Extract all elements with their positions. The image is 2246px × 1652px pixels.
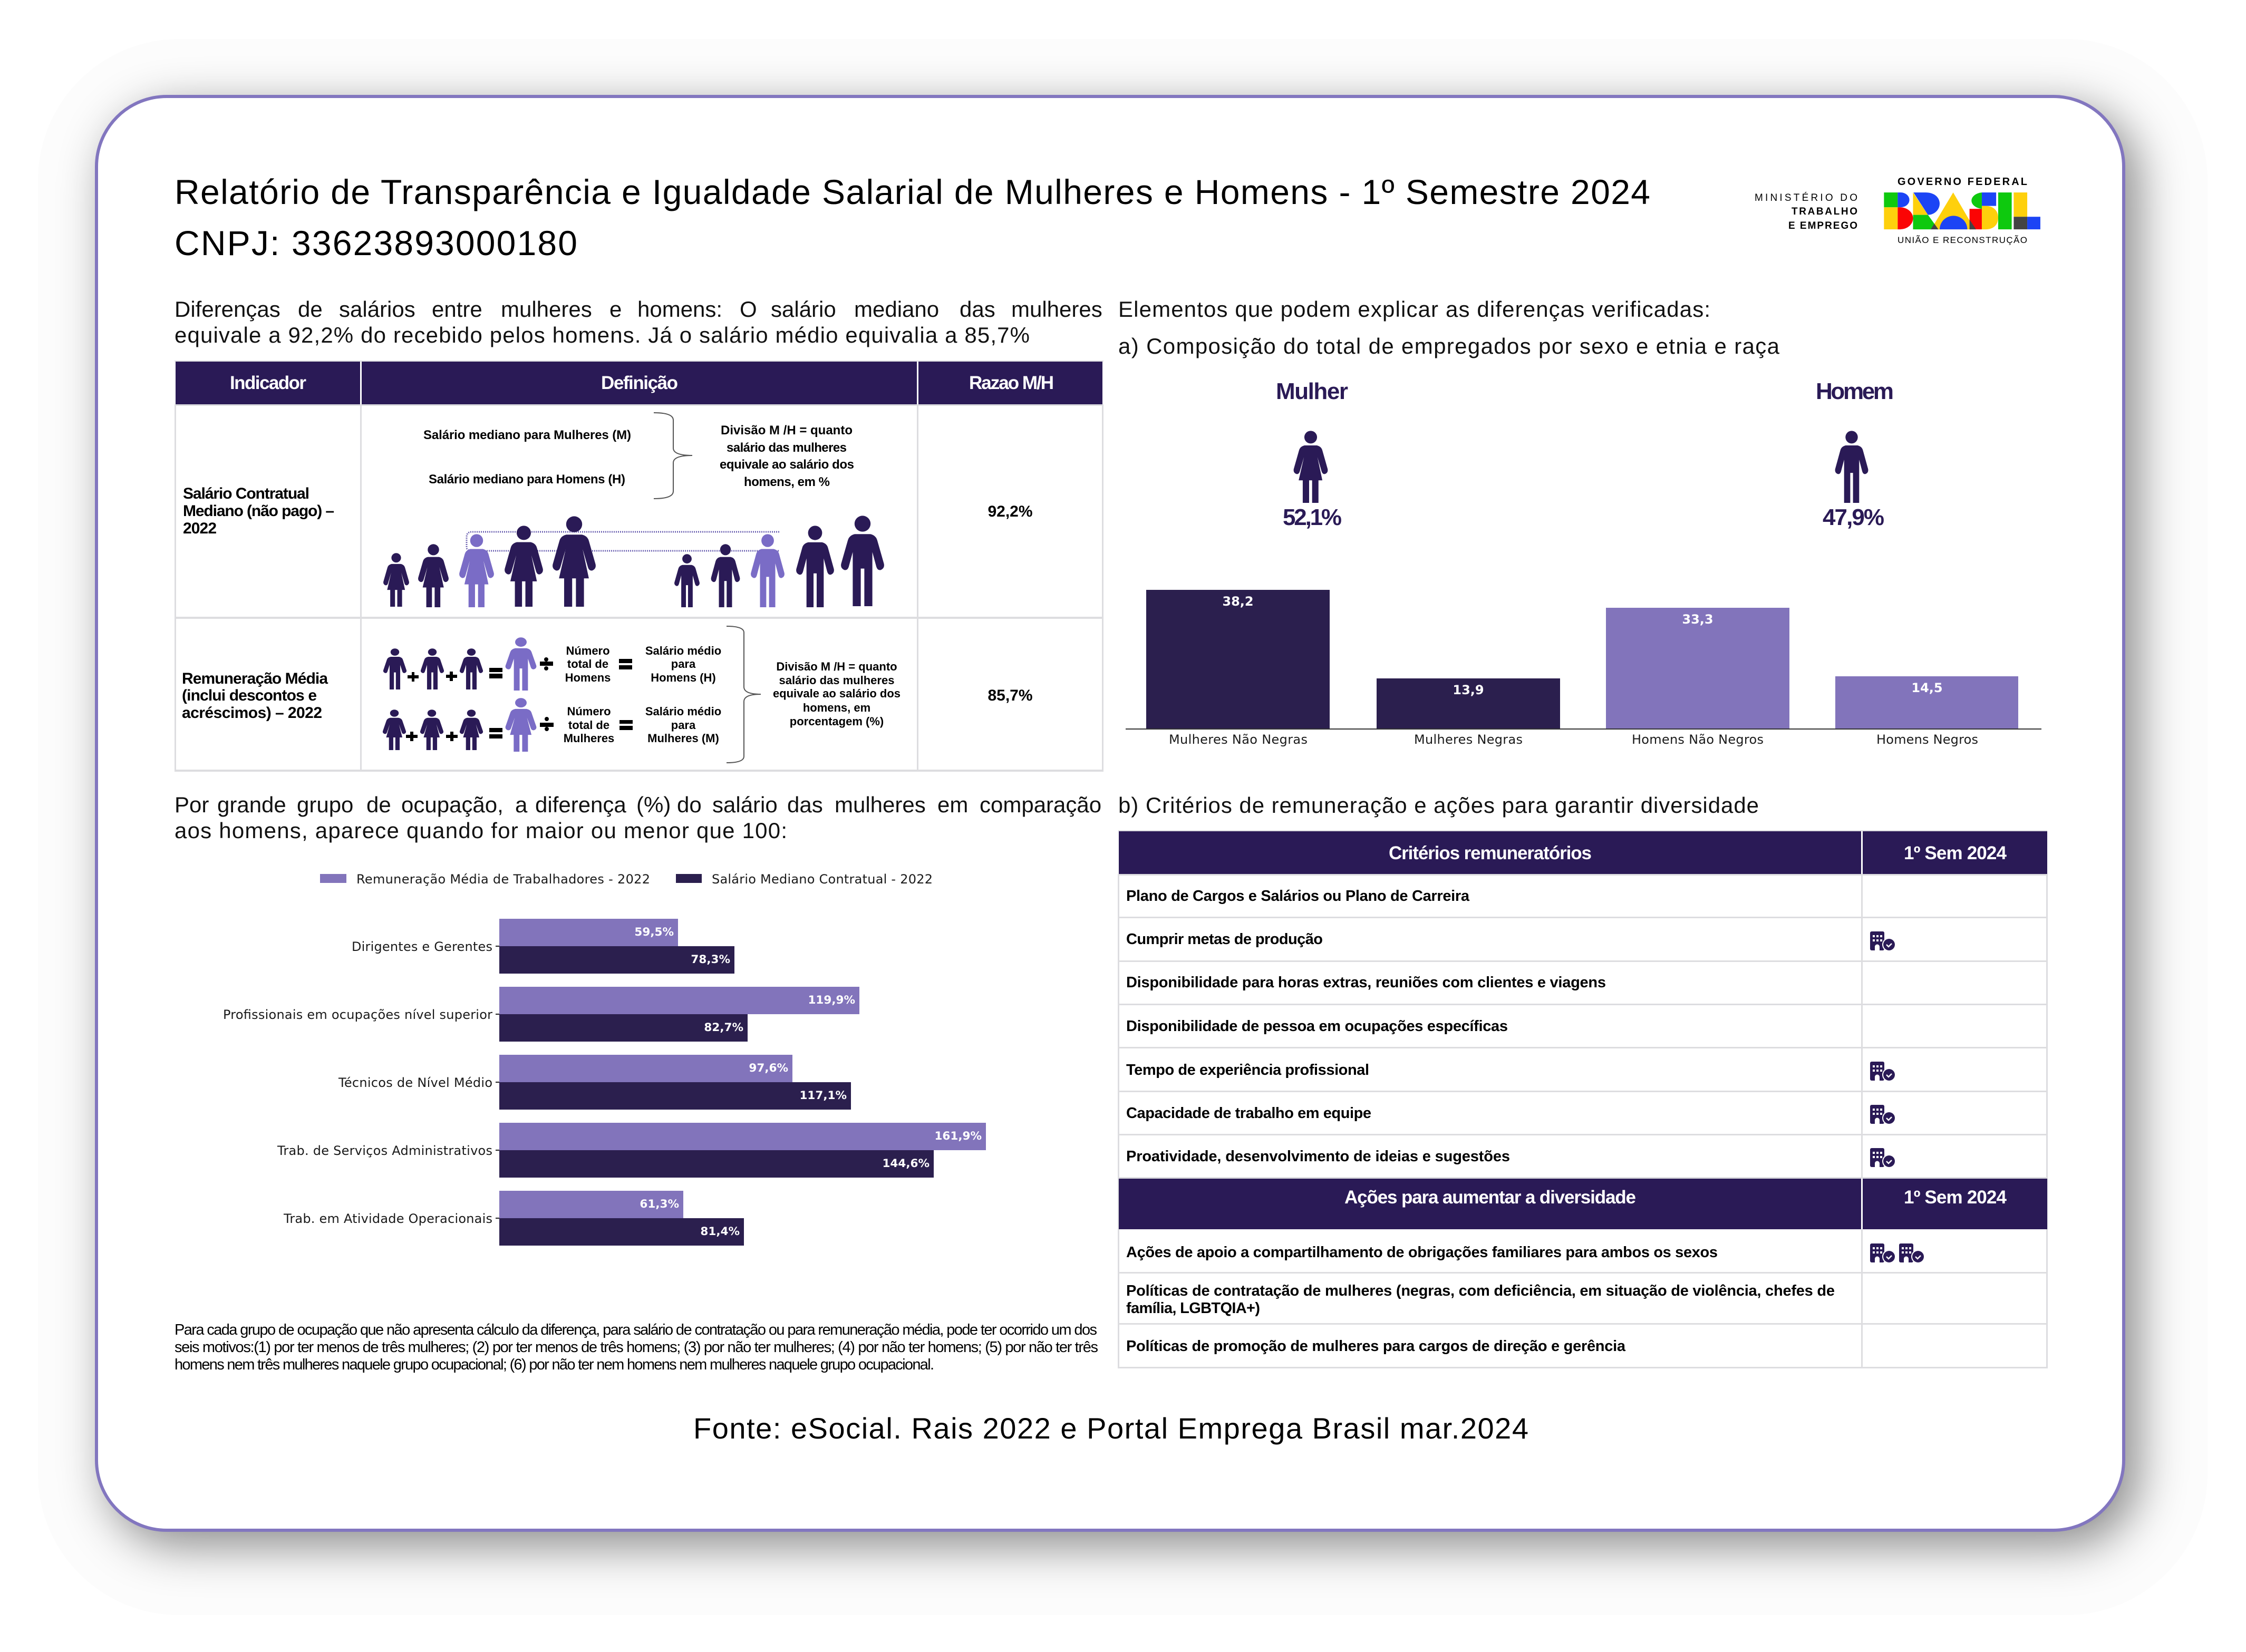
- bar: homens negros: Homens Negros: [1876, 732, 1978, 747]
- table header: Definição: [601, 373, 678, 393]
- heading: composição: a) Composição do total de empregados por sexo e etnia e raça: [1118, 334, 1780, 358]
- sex split: homem: 47,9%: [1823, 504, 1884, 530]
- ministry wordmark: MINISTÉRIO DO: [1755, 192, 1857, 203]
- logos: ministério and governo federal: [1755, 176, 2040, 245]
- definition text: mediano: [423, 428, 631, 487]
- intro text left: e: [609, 297, 622, 322]
- criteria rows: [1126, 888, 1606, 1165]
- bar: homens não negros: [1606, 608, 1789, 747]
- definition text: mediano: Salário mediano para Mulheres (M): [423, 428, 631, 442]
- sex split: homem: Homem: [1816, 378, 1894, 404]
- header: critérios: Critérios remuneratórios: [1389, 843, 1592, 863]
- group: atividade operacionais: Trab. em Atividade Operacionais: [283, 1211, 492, 1226]
- icon: building check, produção: [1870, 931, 1896, 951]
- heading: grupo de ocupação: grande: [217, 792, 286, 817]
- legend: [320, 872, 933, 887]
- group: serviços administrativos: [277, 1123, 986, 1178]
- equation: men average: [383, 637, 721, 691]
- brace: média: [727, 626, 761, 763]
- explanation: divisão média: salário das mulheres: [779, 674, 894, 687]
- table header: Razao M/H: [969, 373, 1054, 393]
- equation: men average: Homens (H): [651, 671, 716, 684]
- icon: woman: [1294, 431, 1328, 503]
- group: profissionais: Profissionais em ocupações nível superior: [223, 1007, 492, 1022]
- criteria rows: Plano de Cargos e Salários ou Plano de Carreira: [1126, 888, 1470, 905]
- heading: grupo de ocupação: ocupação,: [401, 792, 504, 817]
- group: serviços administrativos: Trab. de Serviços Administrativos: [277, 1143, 492, 1158]
- group: profissionais: 119,9%: [808, 994, 855, 1007]
- equation: men average: Homens: [565, 671, 611, 684]
- intro text left: salários: [339, 297, 415, 322]
- união e reconstrução label: UNIÃO E RECONSTRUÇÃO: [1898, 235, 2027, 245]
- intro text left: mediano: [854, 297, 939, 322]
- action rows: família, LGBTQIA+): [1126, 1300, 1260, 1317]
- table header: Indicador: [230, 373, 306, 393]
- intro text left: de: [298, 297, 323, 322]
- criteria rows: Cumprir metas de produção: [1126, 931, 1323, 948]
- intro text left: equivale a 92,2% do recebido pelos homens. Já o salário médio equivalia a 85,7%: [175, 323, 1030, 347]
- criteria rows: Proatividade, desenvolvimento de ideias e sugestões: [1126, 1148, 1510, 1165]
- table: indicador, definição, razão: [175, 361, 1103, 772]
- group: profissionais: [223, 987, 859, 1042]
- intro text left: Diferenças: [175, 297, 280, 322]
- heading: grupo de ocupação: Por: [175, 792, 209, 817]
- header: ações: 1º Sem 2024: [1904, 1187, 2007, 1208]
- explanation: divisão média: equivale ao salário dos: [773, 687, 901, 700]
- explanation: divisão mediano: equivale ao salário dos: [720, 458, 854, 472]
- group: atividade operacionais: 81,4%: [700, 1225, 740, 1238]
- action rows: Políticas de contratação de mulheres (negras, com deficiência, em situação de violência, chefes de: [1126, 1282, 1835, 1299]
- bar chart: sex and race composition: [1126, 590, 2041, 747]
- heading: grupo de ocupação: mulheres: [835, 792, 926, 817]
- explanation: divisão média: porcentagem (%): [790, 715, 884, 728]
- bar: mulheres negras: 13,9: [1453, 683, 1484, 697]
- group: técnicos: Técnicos de Nível Médio: [338, 1075, 492, 1090]
- group: serviços administrativos: 161,9%: [934, 1130, 982, 1143]
- brace: mediano: [654, 413, 692, 499]
- icon row: women by salary: [383, 516, 596, 607]
- intro text left: das: [960, 297, 995, 322]
- explanation: divisão média: [773, 660, 901, 728]
- heading: grupo de ocupação: salário: [712, 792, 778, 817]
- group: dirigentes e gerentes: 59,5%: [634, 926, 674, 939]
- bar: mulheres não negras: Mulheres Não Negras: [1169, 732, 1308, 747]
- heading: grupo de ocupação: do: [677, 792, 702, 817]
- group: atividade operacionais: [283, 1191, 744, 1246]
- row label: remuneração média: acréscimos) – 2022: [182, 704, 322, 722]
- governo federal label: GOVERNO FEDERAL: [1898, 176, 2027, 188]
- equation: women average: total de: [568, 718, 609, 732]
- row label: salário contratual mediano: 2022: [183, 520, 217, 537]
- sex split: mulher: 52,1%: [1283, 504, 1342, 530]
- row label: remuneração média: (inclui descontos e: [182, 687, 317, 704]
- bar: homens não negros: 33,3: [1682, 612, 1713, 627]
- equation: men average: Número: [566, 644, 610, 657]
- header: ações: Ações para aumentar a diversidade: [1344, 1187, 1636, 1208]
- equation: men average: para: [671, 657, 696, 670]
- value: 85,7%: 85,7%: [988, 687, 1033, 704]
- bar: mulheres não negras: 38,2: [1222, 594, 1254, 609]
- row label: salário contratual mediano: [183, 485, 334, 537]
- footnote: seis motivos:(1) por ter menos de três mulheres; (2) por ter menos de três homens; (3) por não ter mulheres; (4) por não ter homens; (5) por não ter três: [175, 1339, 1098, 1356]
- equation: men average: total de: [567, 657, 608, 670]
- group: dirigentes e gerentes: [352, 919, 734, 974]
- criteria rows: Disponibilidade para horas extras, reuniões com clientes e viagens: [1126, 974, 1606, 991]
- explanation: divisão média: homens, em: [803, 701, 870, 714]
- group: atividade operacionais: 61,3%: [640, 1198, 679, 1211]
- explanation: divisão média: Divisão M /H = quanto: [776, 660, 897, 673]
- sex split: homem: [1816, 378, 1894, 530]
- explanation: divisão mediano: homens, em %: [744, 475, 830, 489]
- criteria rows: Capacidade de trabalho em equipe: [1126, 1105, 1371, 1122]
- heading: critérios: b) Critérios de remuneração e ações para garantir diversidade: [1118, 793, 1759, 818]
- heading: grupo de ocupação: grupo: [297, 792, 353, 817]
- equation: women average: [383, 698, 721, 752]
- group: técnicos: 117,1%: [799, 1089, 847, 1102]
- explanation: divisão mediano: Divisão M /H = quanto: [721, 423, 853, 438]
- criteria rows: Disponibilidade de pessoa em ocupações específicas: [1126, 1018, 1508, 1035]
- group: profissionais: 82,7%: [704, 1021, 743, 1034]
- heading: grupo de ocupação: diferença: [535, 792, 626, 817]
- explanation: divisão mediano: salário das mulheres: [727, 441, 847, 455]
- brasil colored block mark: [1884, 192, 2040, 229]
- bar: mulheres não negras: [1146, 590, 1330, 747]
- equation: women average: Mulheres (M): [647, 732, 719, 745]
- icon: building check, experiência: [1870, 1062, 1896, 1082]
- group: serviços administrativos: 144,6%: [882, 1157, 930, 1170]
- source line: Fonte: eSocial. Rais 2022 e Portal Emprega Brasil mar.2024: [693, 1412, 1528, 1445]
- bar: mulheres negras: [1377, 678, 1560, 747]
- heading: grupo de ocupação: de: [366, 792, 391, 817]
- table: critérios remuneratórios e ações: [1118, 830, 2048, 1368]
- row label: remuneração média: [182, 670, 328, 722]
- card panel with purple border and drop shadow: [95, 95, 2125, 1532]
- title: Relatório de Transparência e Igualdade Salarial de Mulheres e Homens - 1º Semestre 2024: [175, 172, 1650, 211]
- intro text left: O: [740, 297, 757, 322]
- row label: remuneração média: Remuneração Média: [182, 670, 328, 687]
- bar chart: occupation groups: [223, 872, 986, 1246]
- criteria rows: Tempo de experiência profissional: [1126, 1062, 1369, 1078]
- footnote: homens nem três mulheres naquele grupo ocupacional; (6) por não ter nem homens nem mulheres naquele grupo ocupacional.: [175, 1356, 934, 1373]
- heading: grupo de ocupação: aos homens, aparece quando for maior ou menor que 100:: [175, 818, 787, 843]
- definition text: mediano: Salário mediano para Homens (H): [429, 472, 625, 487]
- equation: women average: Salário médio: [645, 705, 721, 718]
- header: critérios: [1119, 831, 2047, 874]
- row label: salário contratual mediano: Salário Contratual: [183, 485, 309, 502]
- bar: homens negros: [1835, 676, 2018, 747]
- value: 92,2%: 92,2%: [988, 503, 1033, 520]
- intro text left: entre: [432, 297, 482, 322]
- sex split: mulher: [1276, 378, 1348, 530]
- ministry wordmark: E EMPREGO: [1788, 220, 1857, 231]
- heading: grupo de ocupação: das: [787, 792, 823, 817]
- equation: women average: Mulheres: [564, 732, 614, 745]
- action rows: [1126, 1244, 1835, 1355]
- heading: grupo de ocupação: comparação: [980, 792, 1101, 817]
- header: ações: [1119, 1179, 2047, 1229]
- title: CNPJ: 33623893000180: [175, 223, 577, 263]
- dotted median connector: [467, 532, 779, 551]
- header: critérios: 1º Sem 2024: [1904, 843, 2007, 863]
- footnote: [175, 1321, 1098, 1373]
- action rows: Políticas de promoção de mulheres para cargos de direção e gerência: [1126, 1338, 1626, 1355]
- heading: grupo de ocupação: a: [515, 792, 528, 817]
- heading: elementos: Elementos que podem explicar as diferenças verificadas:: [1118, 297, 1710, 322]
- icon: man: [1835, 431, 1868, 503]
- intro text left: mulheres: [1011, 297, 1102, 322]
- explanation: divisão mediano: [720, 423, 854, 489]
- intro text left: mulheres: [501, 297, 592, 322]
- action rows: Ações de apoio a compartilhamento de obrigações familiares para ambos os sexos: [1126, 1244, 1718, 1261]
- icon row: men by salary: [674, 516, 884, 607]
- group: dirigentes e gerentes: Dirigentes e Gerentes: [352, 939, 492, 954]
- icon: building check, equipe: [1870, 1105, 1896, 1125]
- equation: men average: Salário médio: [645, 644, 721, 657]
- group: técnicos: [338, 1055, 851, 1110]
- sex split: mulher: Mulher: [1276, 378, 1348, 404]
- ministry wordmark: [1755, 192, 1857, 231]
- ministry wordmark: TRABALHO: [1792, 206, 1857, 217]
- bar: homens não negros: Homens Não Negros: [1632, 732, 1764, 747]
- heading: grupo de ocupação: em: [937, 792, 968, 817]
- heading: grupo de ocupação: (%): [636, 792, 671, 817]
- equation: women average: para: [671, 718, 696, 732]
- row label: salário contratual mediano: Mediano (não pago) –: [183, 502, 334, 520]
- icons: two building checks, apoio: [1870, 1243, 1925, 1264]
- intro text left: homens:: [637, 297, 722, 322]
- group: técnicos: 97,6%: [749, 1062, 788, 1075]
- bar: mulheres negras: Mulheres Negras: [1414, 732, 1523, 747]
- table header: [176, 362, 1102, 404]
- icon: building check, proatividade: [1870, 1148, 1896, 1168]
- legend: Salário Mediano Contratual - 2022: [712, 872, 933, 887]
- legend: Remuneração Média de Trabalhadores - 2022: [356, 872, 650, 887]
- equation: women average: Número: [567, 705, 611, 718]
- intro text left: salário: [771, 297, 836, 322]
- footnote: Para cada grupo de ocupação que não apresenta cálculo da diferença, para salário de contratação ou para remuneração média, pode ter ocorrido um dos: [175, 1321, 1097, 1338]
- group: dirigentes e gerentes: 78,3%: [691, 953, 730, 966]
- bar: homens negros: 14,5: [1911, 681, 1943, 695]
- title: [175, 172, 1650, 263]
